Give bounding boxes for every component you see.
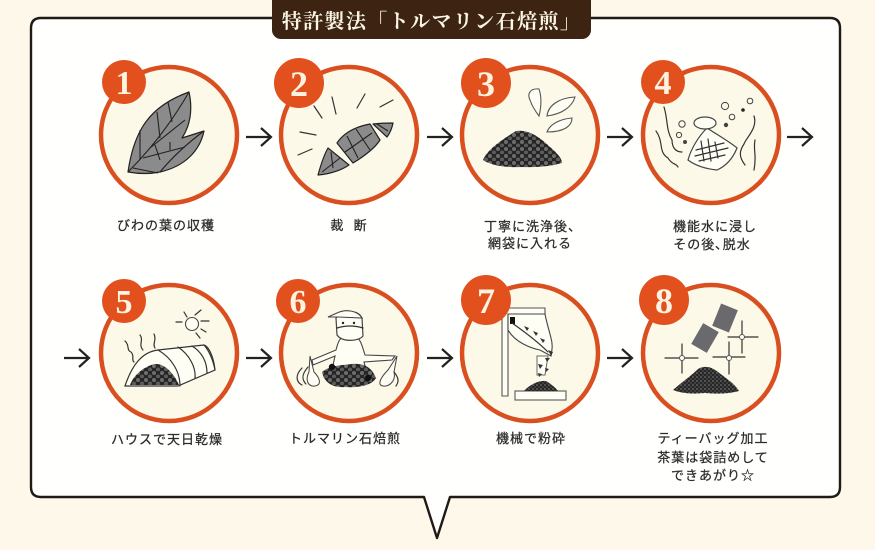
step 8: tea bag processing <box>639 275 779 483</box>
caption <box>484 219 582 251</box>
arrow after 4 <box>787 128 812 146</box>
number badge 4: 4 <box>654 65 672 102</box>
title banner <box>272 0 591 39</box>
caption: ティーバッグ加工 <box>657 431 769 446</box>
caption <box>657 431 769 483</box>
step 2: cutting <box>274 58 417 233</box>
caption: トルマリン石焙煎 <box>289 431 401 446</box>
caption: その後､脱水 <box>673 237 751 252</box>
icon: washed leaf pile with water drops <box>483 89 575 167</box>
icon: mesh bag in water with bubbles <box>656 98 755 170</box>
number badge 5 <box>102 279 146 323</box>
number badge 6 <box>276 279 320 323</box>
number badge 1: 1 <box>116 65 132 102</box>
arrow 7 to 8 <box>607 349 632 367</box>
step 5: sun drying in greenhouse <box>101 279 237 447</box>
cut rays <box>298 94 393 155</box>
number badge 8: 8 <box>655 281 673 321</box>
caption: 茶葉は袋詰めして <box>657 450 769 465</box>
icon: crushing machine <box>502 308 566 400</box>
caption: びわの葉の収穫 <box>117 218 215 233</box>
arrow 3 to 4 <box>607 128 632 146</box>
caption: できあがり☆ <box>671 468 755 483</box>
icon: greenhouse, sun and steam <box>125 310 215 386</box>
icon: tea bags, sparkles and tea pile <box>665 304 758 394</box>
caption: 網袋に入れる <box>488 236 572 251</box>
arrow before 5 <box>64 349 89 367</box>
number badge 7 <box>461 275 511 325</box>
number badge 2 <box>274 58 324 108</box>
number badge 4 <box>641 60 685 104</box>
number badge 3: 3 <box>477 64 495 104</box>
number badge 2: 2 <box>290 64 308 104</box>
number badge 7: 7 <box>477 281 495 321</box>
number badge 5: 5 <box>116 284 132 321</box>
number badge 6: 6 <box>290 284 306 321</box>
arrow 5 to 6 <box>246 349 271 367</box>
arrow 2 to 3 <box>427 128 452 146</box>
number badge 1 <box>102 60 146 104</box>
number badge 3 <box>461 58 511 108</box>
number badge 8 <box>639 275 689 325</box>
caption: 機能水に浸し <box>673 219 757 234</box>
step 7: crushing by machine <box>461 275 598 446</box>
icon: cut leaf <box>298 94 393 175</box>
step 4: soaking in functional water <box>641 60 779 252</box>
step 1: loquat leaf harvest <box>101 60 237 233</box>
step 3: washing <box>461 58 598 251</box>
arrow 6 to 7 <box>427 349 452 367</box>
caption <box>673 219 757 252</box>
icon: loquat leaves <box>128 92 204 174</box>
caption: 機械で粉砕 <box>496 431 566 446</box>
caption: 裁 断 <box>330 218 368 233</box>
icon: worker roasting with bags <box>297 311 398 387</box>
caption: 丁寧に洗浄後、 <box>484 219 582 234</box>
step 6: tourmaline stone roasting <box>276 279 417 446</box>
arrow 1 to 2 <box>246 128 271 146</box>
title text: 特許製法「トルマリン石焙煎」 <box>282 9 581 33</box>
caption: ハウスで天日乾燥 <box>111 432 223 447</box>
